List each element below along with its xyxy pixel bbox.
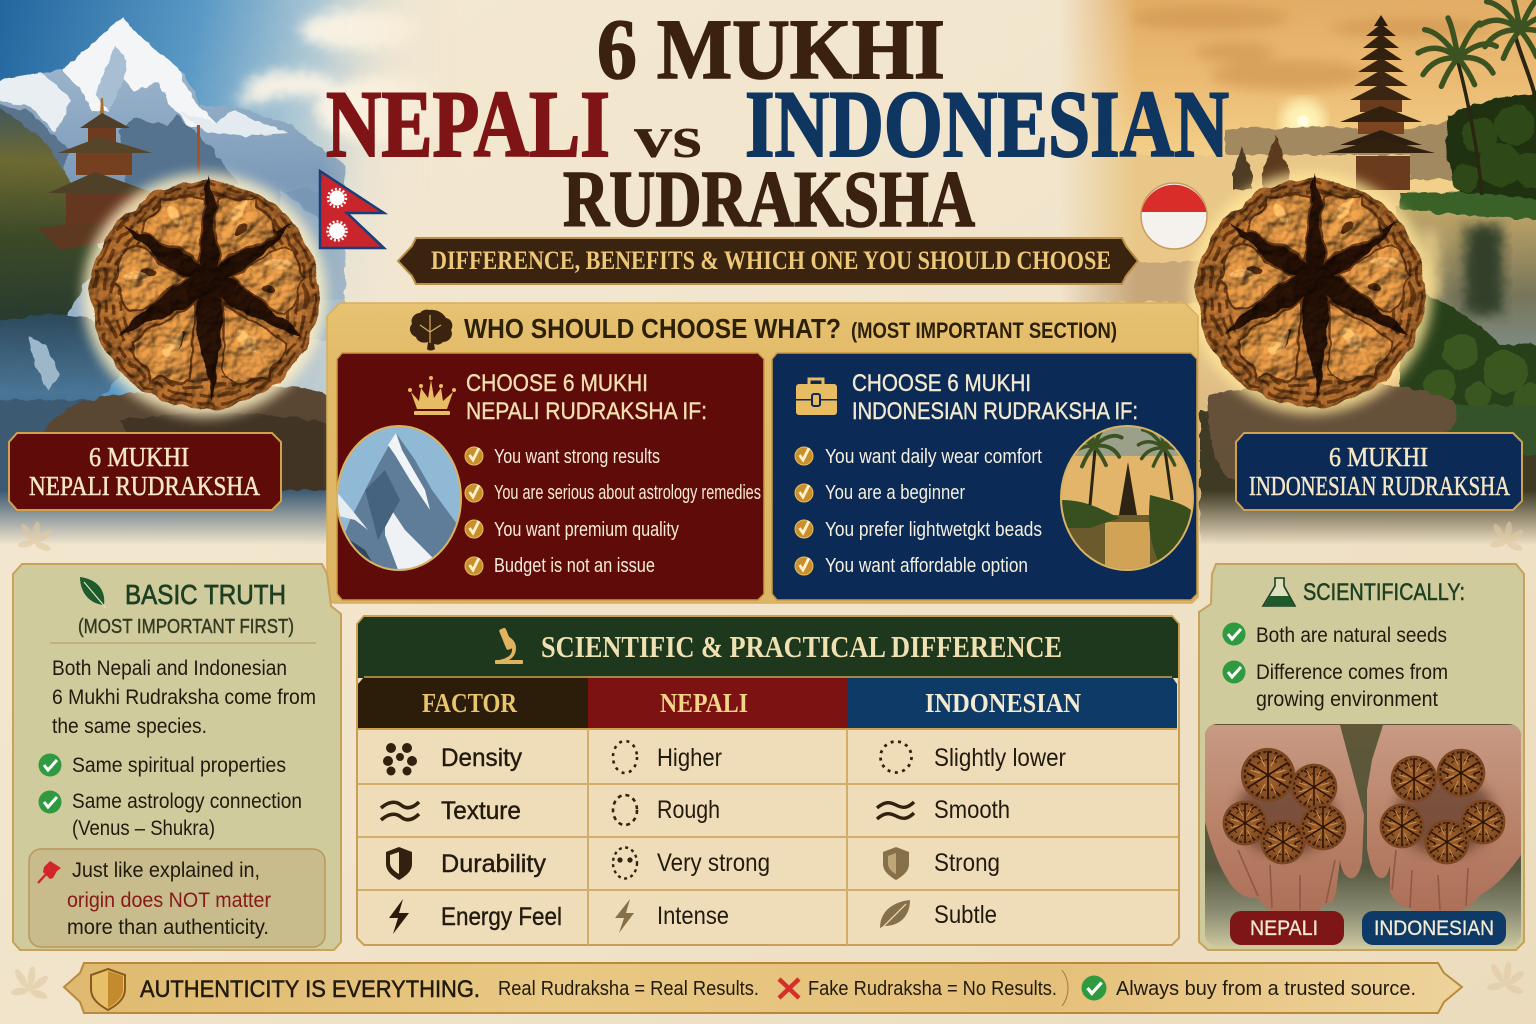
- icon: green check: [1082, 976, 1106, 1000]
- icon: red cross: [779, 979, 799, 998]
- hills: [1224, 120, 1452, 181]
- rock: [1208, 382, 1457, 480]
- plaque: Nepali label: [9, 433, 281, 510]
- panel: scientifically: [1199, 564, 1524, 950]
- icon: Indonesian rudraksha bead: [1190, 172, 1432, 414]
- badge: Indonesian: INDONESIAN: [1374, 917, 1494, 940]
- hand: left: [1205, 725, 1364, 911]
- image: tropical lake oval: [1060, 417, 1195, 575]
- list: Indonesian reasons: You are a beginner: [825, 482, 965, 504]
- table header row: FACTOR: [422, 688, 517, 718]
- icon: leaf: [80, 577, 106, 608]
- heading: [464, 313, 1117, 344]
- callout: origin does NOT matter: [67, 889, 271, 912]
- heading: [466, 370, 707, 425]
- icon: microscope: [495, 627, 523, 664]
- callout: [29, 849, 325, 947]
- body text: 6 Mukhi Rudraksha come from: [52, 686, 316, 709]
- shrines: [1233, 146, 1252, 190]
- panel: who should choose what: [327, 303, 1198, 603]
- subtitle banner: DIFFERENCE, BENEFITS & WHICH ONE YOU SHOULD CHOOSE: [431, 246, 1111, 275]
- badge: Nepali: [1230, 911, 1344, 945]
- scene: Indonesian temple and lake at sunset: [1060, 0, 1536, 545]
- check list: Same spiritual properties: [72, 754, 286, 777]
- subtitle banner: [398, 238, 1138, 284]
- row: durability: Durability: [441, 850, 546, 878]
- row: energy feel: [389, 899, 997, 934]
- heading: [852, 370, 1138, 425]
- table header row: INDONESIAN: [925, 688, 1081, 718]
- icon: shield dark: [386, 847, 412, 880]
- temple: [1328, 15, 1435, 190]
- plaque: Nepali label: NEPALI RUDRAKSHA: [29, 471, 260, 501]
- lower foliage: [1399, 293, 1536, 407]
- list: Nepali reasons: You want strong results: [494, 446, 660, 468]
- plaque: Indonesian label: [1236, 433, 1522, 510]
- hand: right: [1367, 725, 1521, 911]
- table header row: NEPALI: [660, 688, 748, 718]
- heading: CHOOSE 6 MUKHI: [852, 370, 1031, 397]
- heading: (MOST IMPORTANT FIRST): [78, 616, 294, 638]
- heading: (MOST IMPORTANT SECTION): [851, 318, 1117, 343]
- heading: NEPALI RUDRAKSHA IF:: [466, 398, 707, 425]
- heading: WHO SHOULD CHOOSE WHAT?: [464, 313, 841, 344]
- badge: Nepali: NEPALI: [1250, 917, 1318, 940]
- panel: choose Nepali: [335, 353, 764, 600]
- row: energy feel: Subtle: [934, 901, 997, 929]
- decorative sprigs: [10, 521, 1526, 1001]
- icon: Indonesia flag: [1141, 183, 1207, 249]
- table header row: [358, 677, 1177, 729]
- list: Indonesian reasons: You prefer lightwetgkt beads: [825, 519, 1042, 541]
- icon: red pin: [38, 861, 61, 883]
- beads in left hand: [1223, 748, 1346, 864]
- authenticity banner: AUTHENTICITY IS EVERYTHING.: [140, 976, 480, 1003]
- check list: [1222, 622, 1448, 711]
- heading: [78, 579, 294, 638]
- scene: Nepal mountains and pagoda: [0, 0, 402, 542]
- palms: [1458, 62, 1482, 195]
- pagoda: [38, 98, 160, 250]
- table title bar: SCIENTIFIC & PRACTICAL DIFFERENCE: [541, 629, 1062, 664]
- title: NEPALI: [326, 71, 610, 177]
- row: texture: Smooth: [934, 796, 1010, 824]
- check list: Same astrology connection: [72, 790, 302, 813]
- icon: dashed circle: [613, 795, 637, 825]
- icon: dotted circle: [613, 741, 637, 773]
- row: durability: Strong: [934, 849, 1000, 877]
- icon: crown: [408, 376, 456, 415]
- image: mountain oval: [335, 426, 465, 575]
- list: Nepali reasons: You are serious about astrology remedies: [494, 482, 761, 504]
- icon: waves: [877, 802, 914, 819]
- title: vs: [634, 104, 702, 170]
- list: Nepali reasons: [465, 446, 761, 577]
- icon: leaf: [879, 900, 910, 931]
- title: INDONESIAN: [745, 71, 1229, 177]
- comparison table: [357, 616, 1179, 945]
- panel: choose Indonesian: [772, 353, 1197, 600]
- heading: INDONESIAN RUDRAKSHA IF:: [852, 398, 1138, 425]
- list: Nepali reasons: You want premium quality: [494, 519, 679, 541]
- row: texture: Rough: [657, 796, 720, 824]
- icon: shield gold: [883, 847, 909, 880]
- icon: briefcase: [796, 379, 837, 415]
- beads in right hand: [1380, 749, 1505, 864]
- rock: [44, 386, 326, 432]
- check list: Both are natural seeds: [1256, 624, 1447, 647]
- row: density: Density: [441, 744, 522, 772]
- check list: growing environment: [1256, 688, 1438, 711]
- plaque: Nepali label: 6 MUKHI: [89, 442, 189, 472]
- left hillside: [0, 108, 102, 320]
- icon: bolt light: [615, 899, 634, 933]
- check list: Difference comes from: [1256, 661, 1448, 684]
- title: RUDRAKSHA: [563, 156, 975, 244]
- icon: flask: [1263, 578, 1295, 606]
- list: Nepali reasons: Budget is not an issue: [494, 555, 655, 577]
- icon: Nepal flag: [320, 171, 384, 248]
- heading: BASIC TRUTH: [125, 579, 286, 610]
- body text: Both Nepali and Indonesian: [52, 657, 287, 680]
- check list: [38, 754, 302, 840]
- icon: shield: [91, 969, 125, 1010]
- list: Indonesian reasons: You want affordable option: [825, 555, 1028, 577]
- icon: density dots: [383, 743, 417, 776]
- icon: dotted face: [613, 848, 637, 878]
- ground: [1200, 410, 1536, 545]
- misty lower valley: [0, 314, 121, 402]
- heading: CHOOSE 6 MUKHI: [466, 370, 648, 397]
- authenticity banner: Always buy from a trusted source.: [1116, 978, 1416, 1000]
- row: texture: Texture: [441, 797, 521, 825]
- row: durability: Very strong: [657, 849, 770, 877]
- authenticity banner: [64, 963, 1462, 1013]
- title: [326, 1, 1229, 244]
- image: hands holding beads: [1205, 724, 1521, 946]
- authenticity banner: Fake Rudraksha = No Results.: [808, 978, 1057, 1000]
- icon: bolt dark: [389, 899, 409, 934]
- table title bar: [358, 617, 1178, 678]
- row: texture: [381, 795, 1010, 825]
- row: density: Higher: [657, 744, 722, 772]
- callout: Just like explained in,: [72, 859, 260, 882]
- title: 6 MUKHI: [597, 1, 945, 97]
- body text: the same species.: [52, 715, 207, 738]
- row: energy feel: Energy Feel: [441, 903, 562, 931]
- list: Indonesian reasons: [795, 446, 1042, 577]
- row: energy feel: Intense: [657, 902, 729, 930]
- prayer flag: [197, 125, 200, 173]
- heading: SCIENTIFICALLY:: [1303, 579, 1465, 606]
- row: density: Slightly lower: [934, 744, 1066, 772]
- plaque: Indonesian label: 6 MUKHI: [1329, 442, 1428, 472]
- row: density: [383, 741, 1066, 776]
- callout: more than authenticity.: [67, 916, 269, 939]
- jungle: [1446, 90, 1536, 205]
- authenticity banner: Real Rudraksha = Real Results.: [498, 978, 759, 1000]
- badge: Indonesian: [1362, 911, 1506, 945]
- body text: [52, 657, 316, 738]
- icon: dotted circle: [880, 742, 912, 772]
- check list: (Venus – Shukra): [72, 817, 215, 840]
- icon: brain: [410, 310, 452, 350]
- icon: waves: [381, 802, 419, 820]
- panel: basic truth: [13, 564, 341, 950]
- icon: Nepali rudraksha bead: [83, 173, 327, 417]
- row: durability: [386, 847, 1000, 880]
- lake: [1395, 205, 1536, 355]
- list: Indonesian reasons: You want daily wear comfort: [825, 446, 1042, 468]
